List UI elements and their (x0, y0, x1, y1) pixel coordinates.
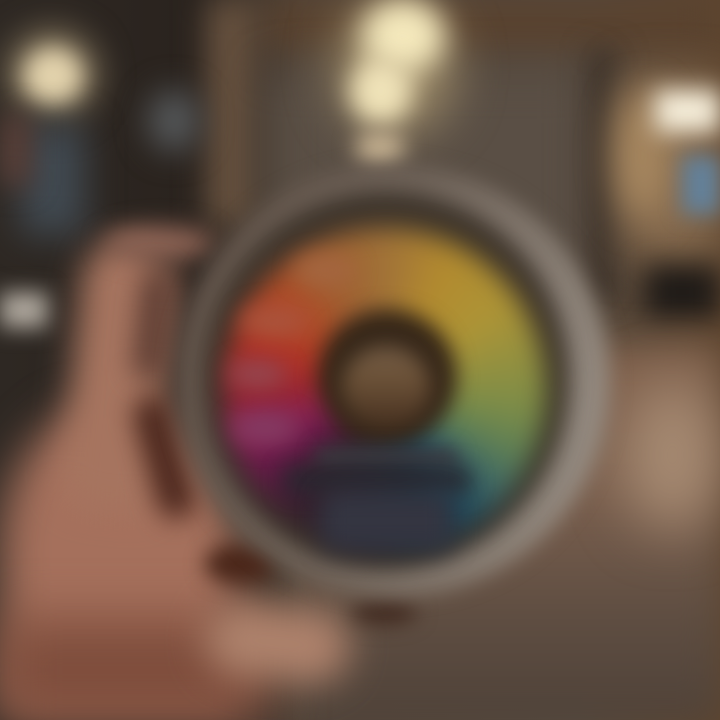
wheel segment highlight: coral (240, 306, 308, 336)
central hub face (342, 346, 430, 428)
ceiling band (260, 0, 720, 50)
grey blur light (148, 90, 200, 152)
wall column (208, 0, 254, 225)
lamp stem glow (355, 130, 405, 166)
shadow at thumb tip (352, 600, 417, 624)
ceiling lamp glow (362, 0, 444, 72)
reddish shelf edge (0, 115, 30, 185)
lower display dark line (285, 468, 470, 492)
blue panel (682, 156, 720, 214)
warm lamp glow on right wall (615, 90, 670, 220)
lamp lower glow (350, 58, 412, 124)
ceiling lamp halo (335, 0, 455, 135)
finger shadow band lower (129, 392, 199, 523)
left pendant light (24, 48, 82, 104)
lower display panel (322, 492, 452, 550)
wheel segment highlight: pink (228, 360, 286, 388)
shadow at finger joint (205, 545, 275, 583)
dark pillar (590, 50, 618, 300)
gauge outer grey ring (176, 166, 610, 596)
finger shadow band upper (132, 269, 174, 381)
index finger (58, 236, 181, 514)
dark right furniture (645, 266, 720, 318)
right bright window (655, 90, 720, 132)
floor glare (625, 380, 720, 530)
lower display band (316, 448, 458, 468)
wheel segment highlight: orange (295, 255, 355, 285)
gauge dark inner rim (203, 192, 569, 568)
blue-grey shelf (20, 125, 85, 235)
lower palm shade (0, 620, 270, 720)
colour wheel (224, 228, 546, 552)
floor (300, 345, 720, 720)
left pendant halo (5, 28, 100, 120)
warm right wall (625, 75, 720, 260)
white strip (0, 292, 48, 328)
central dark hub (317, 309, 457, 445)
wheel segment highlight: rose (232, 412, 298, 444)
palm (0, 405, 240, 720)
thumb (201, 598, 354, 687)
grey back wall (270, 70, 590, 280)
fingertip (105, 226, 215, 260)
